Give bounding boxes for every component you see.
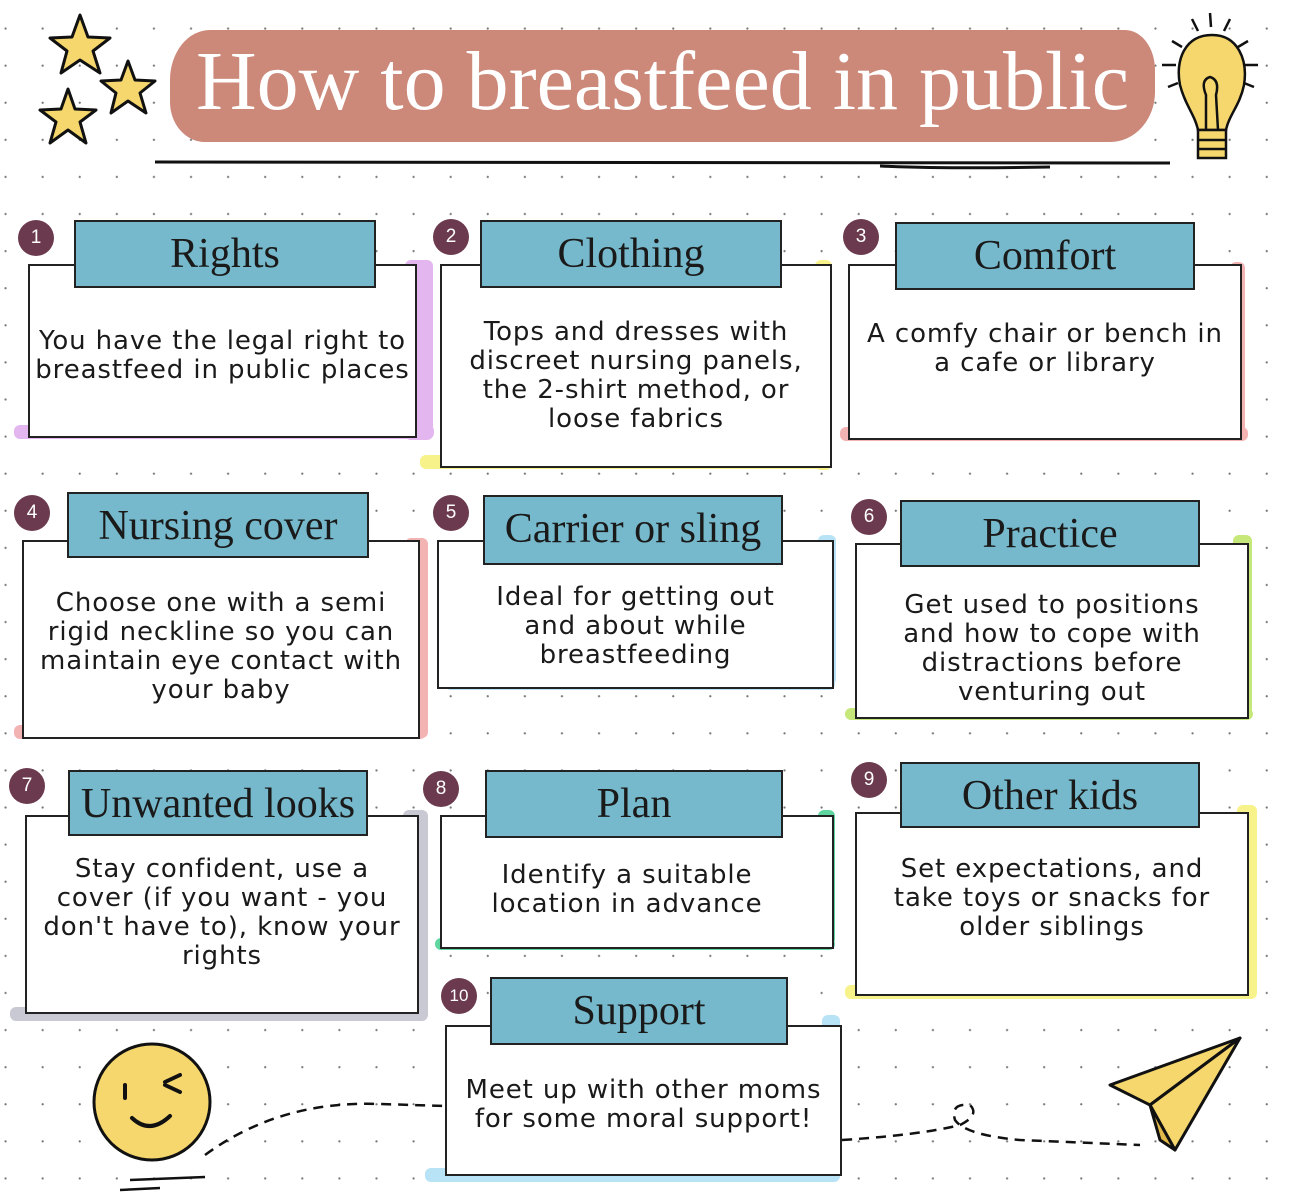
- card 10: Support: 10: [450, 986, 468, 1005]
- card 4: Nursing cover: 4: [27, 502, 37, 523]
- title: How to breastfeed in public: [196, 35, 1129, 128]
- card 8: Plan: 8: [436, 778, 446, 799]
- card 7: Unwanted looks: [9, 768, 428, 1021]
- card 1: Rights: You have the legal right to: [39, 326, 406, 356]
- icon: stars: [38, 14, 156, 145]
- card 4: Nursing cover: [14, 492, 428, 739]
- title banner: [170, 30, 1155, 142]
- card 6: Practice: 6: [864, 506, 874, 527]
- card 3: Comfort: a cafe or library: [934, 348, 1156, 378]
- card 8: Plan: [423, 770, 835, 950]
- icon: light bulb: [1162, 12, 1258, 160]
- card 7: Unwanted looks: 7: [22, 775, 32, 796]
- card 10: Support: for some moral support!: [475, 1104, 812, 1134]
- card 4: Nursing cover: Nursing cover: [98, 503, 338, 549]
- card 3: Comfort: Comfort: [974, 233, 1116, 279]
- card 5: Carrier or sling: and about while: [524, 611, 747, 641]
- card 3: Comfort: [840, 219, 1248, 441]
- card 7: Unwanted looks: Unwanted looks: [81, 781, 355, 827]
- card 7: Unwanted looks: Stay confident, use a: [75, 854, 369, 884]
- card 10: Support: Meet up with other moms: [466, 1075, 821, 1105]
- card 6: Practice: [845, 499, 1253, 720]
- card 7: Unwanted looks: rights: [182, 941, 262, 971]
- card 3: Comfort: A comfy chair or bench in: [867, 319, 1223, 349]
- dashed path left: [204, 1102, 442, 1156]
- icon: paper plane: [1108, 1036, 1242, 1152]
- card 5: Carrier or sling: Ideal for getting out: [496, 582, 775, 612]
- dashed path right with loop: [842, 1104, 1140, 1146]
- card 5: Carrier or sling: [433, 495, 836, 690]
- card 9: Other kids: [845, 762, 1257, 999]
- card 7: Unwanted looks: cover (if you want - you: [57, 883, 387, 913]
- card 3: Comfort: 3: [856, 226, 866, 247]
- card 9: Other kids: Set expectations, and: [901, 854, 1203, 884]
- card 8: Plan: Plan: [597, 781, 671, 827]
- card 9: Other kids: older siblings: [959, 912, 1145, 942]
- card 2: Clothing: Tops and dresses with: [484, 317, 788, 347]
- card 5: Carrier or sling: Carrier or sling: [505, 506, 761, 552]
- title underline: [155, 160, 1170, 170]
- card 4: Nursing cover: Choose one with a semi: [56, 588, 386, 618]
- card 5: Carrier or sling: breastfeeding: [540, 640, 731, 670]
- card 1: Rights: 1: [31, 227, 41, 248]
- card 1: Rights: Rights: [170, 231, 280, 277]
- card 10: Support: [425, 977, 842, 1182]
- card 6: Practice: and how to cope with: [903, 619, 1201, 649]
- card 2: Clothing: loose fabrics: [548, 404, 724, 434]
- card 6: Practice: Practice: [982, 511, 1118, 557]
- card 2: Clothing: 2: [446, 226, 456, 247]
- card 2: Clothing: Clothing: [557, 231, 705, 277]
- card 6: Practice: distractions before: [922, 648, 1182, 678]
- card 9: Other kids: 9: [864, 769, 874, 790]
- card 4: Nursing cover: maintain eye contact with: [40, 646, 402, 676]
- card 1: Rights: breastfeed in public places: [35, 355, 410, 385]
- card 1: Rights: [14, 220, 434, 440]
- card 9: Other kids: take toys or snacks for: [894, 883, 1210, 913]
- card 6: Practice: Get used to positions: [904, 590, 1200, 620]
- card 7: Unwanted looks: don't have to), know your: [43, 912, 401, 942]
- card 4: Nursing cover: rigid neckline so you can: [48, 617, 394, 647]
- icon: winking smiley: [92, 1042, 212, 1192]
- card 2: Clothing: [420, 219, 832, 470]
- card 6: Practice: venturing out: [958, 677, 1146, 707]
- card 5: Carrier or sling: 5: [446, 502, 456, 523]
- card 8: Plan: Identify a suitable: [502, 860, 752, 890]
- card 8: Plan: location in advance: [491, 889, 763, 919]
- card 2: Clothing: the 2-shirt method, or: [483, 375, 789, 405]
- card 9: Other kids: Other kids: [962, 773, 1138, 819]
- card 10: Support: Support: [572, 988, 706, 1034]
- card 4: Nursing cover: your baby: [151, 675, 291, 705]
- card 2: Clothing: discreet nursing panels,: [469, 346, 803, 376]
